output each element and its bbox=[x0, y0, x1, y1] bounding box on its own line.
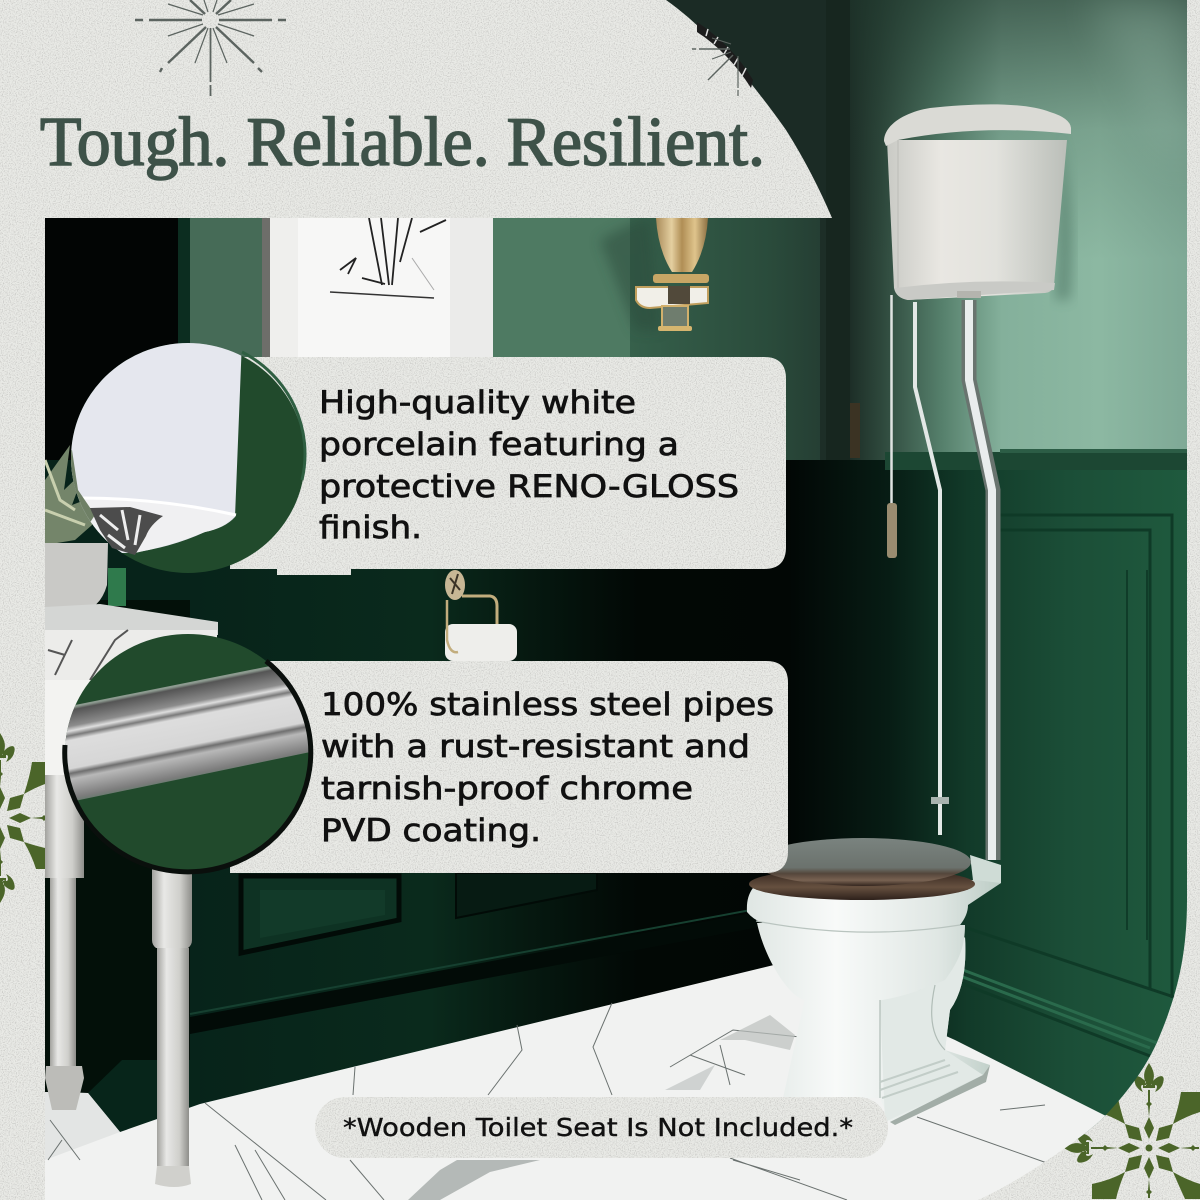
text: steel description bbox=[321, 687, 774, 849]
text: steel description: tarnish-proof chrome bbox=[321, 771, 693, 807]
icon: striped sliver at curve edge bbox=[697, 22, 753, 88]
toilet bowl and pedestal bbox=[747, 838, 1001, 1125]
lower wall panelling bbox=[45, 403, 1190, 1140]
callout image: porcelain close-up bbox=[71, 343, 306, 573]
footnote pill: *Wooden Toilet Seat Is Not Included.* bbox=[343, 1113, 853, 1142]
text: steel description: 100% stainless steel pipes bbox=[321, 687, 774, 723]
text: steel description: with a rust-resistant and bbox=[321, 729, 750, 765]
text: porcelain description: porcelain featuring a bbox=[319, 427, 679, 463]
gold wall sconce bbox=[600, 218, 709, 331]
panel: stainless steel feature bbox=[60, 630, 788, 880]
title: Tough. Reliable. Resilient. bbox=[40, 104, 765, 181]
callout image: chrome pipe close-up bbox=[60, 630, 320, 880]
ornament: left floral tile bbox=[0, 733, 45, 903]
text: steel description: PVD coating. bbox=[321, 813, 541, 849]
upper wall bbox=[45, 0, 1187, 460]
text: porcelain description: finish. bbox=[319, 510, 422, 546]
text: porcelain description: protective RENO-GLOSS bbox=[319, 469, 739, 505]
icon: small starburst bbox=[692, 38, 738, 96]
vanity: plant, pot, marble top, sink and legs bbox=[45, 445, 223, 1187]
framed art bbox=[262, 218, 493, 358]
toilet roll holder bbox=[445, 570, 517, 661]
footnote pill bbox=[315, 1097, 888, 1158]
cistern bbox=[884, 104, 1071, 300]
panel: porcelain feature bbox=[45, 340, 786, 580]
text: porcelain description: High-quality white bbox=[319, 385, 636, 421]
text: porcelain description bbox=[319, 385, 739, 546]
icon: large starburst bbox=[135, 0, 286, 96]
marble floor bbox=[45, 963, 1110, 1200]
paper header shape bbox=[0, 0, 832, 218]
flush pipes and pull chain bbox=[887, 291, 993, 860]
ornament: bottom-right floral tile bbox=[1064, 1063, 1200, 1199]
